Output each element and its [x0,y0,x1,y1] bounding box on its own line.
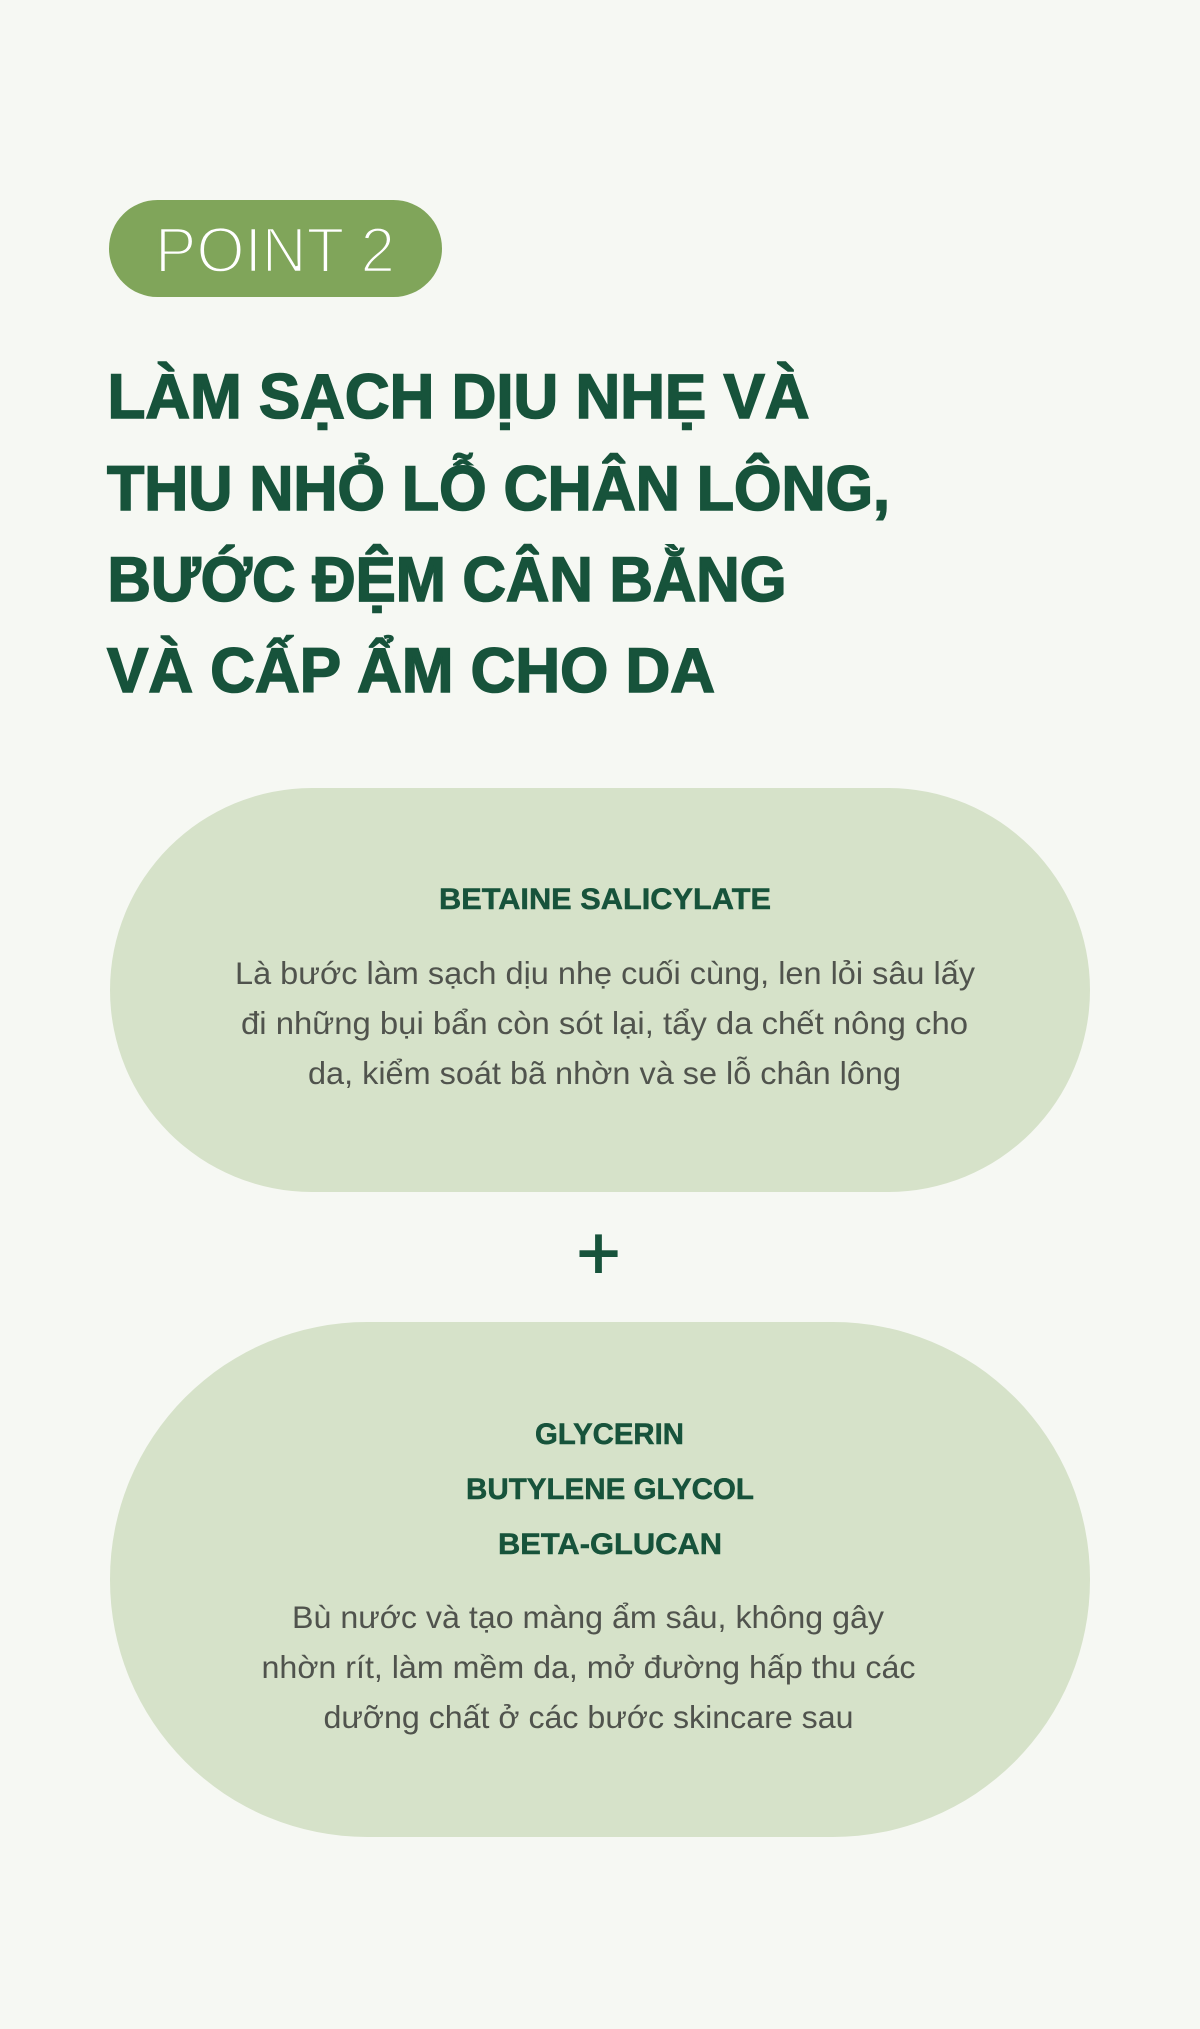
panel body text: ingredients [262,1599,916,1735]
panel: glycerin, butylene glycol, beta-glucan [110,1322,1090,1837]
panel: betaine salicylate [110,788,1090,1192]
heading: VÀ CẤP ẨM CHO DA [107,635,715,706]
panel title: ingredients: BUTYLENE GLYCOL [466,1473,754,1506]
heading: LÀM SẠCH DỊU NHẸ VÀ [108,362,810,432]
heading: THU NHỎ LỖ CHÂN LÔNG, [107,453,890,524]
panel body text: betaine salicylate: đi những bụi bẩn còn sót lại, tẩy da chết nông cho [241,1005,968,1041]
panel title: ingredients [466,1418,754,1561]
panel title: ingredients: GLYCERIN [535,1418,684,1451]
panel title: betaine salicylate: BETAINE SALICYLATE [439,883,771,916]
badge: POINT 2 [109,200,442,297]
panel body text: ingredients: dưỡng chất ở các bước skincare sau [324,1699,854,1735]
heading: BƯỚC ĐỆM CÂN BẰNG [108,544,786,615]
panel body text: betaine salicylate [235,955,975,1091]
panel title: ingredients: BETA-GLUCAN [498,1528,722,1561]
panel body text: betaine salicylate: da, kiểm soát bã nhờn và se lỗ chân lông [308,1055,901,1091]
panel body text: betaine salicylate: Là bước làm sạch dịu nhẹ cuối cùng, len lỏi sâu lấy [235,955,975,991]
badge: POINT 2: POINT 2 [155,214,395,286]
plus sign: + [575,1208,622,1298]
heading [107,362,890,706]
panel body text: ingredients: nhờn rít, làm mềm da, mở đường hấp thu các [262,1649,916,1685]
panel body text: ingredients: Bù nước và tạo màng ẩm sâu, không gây [292,1599,884,1635]
